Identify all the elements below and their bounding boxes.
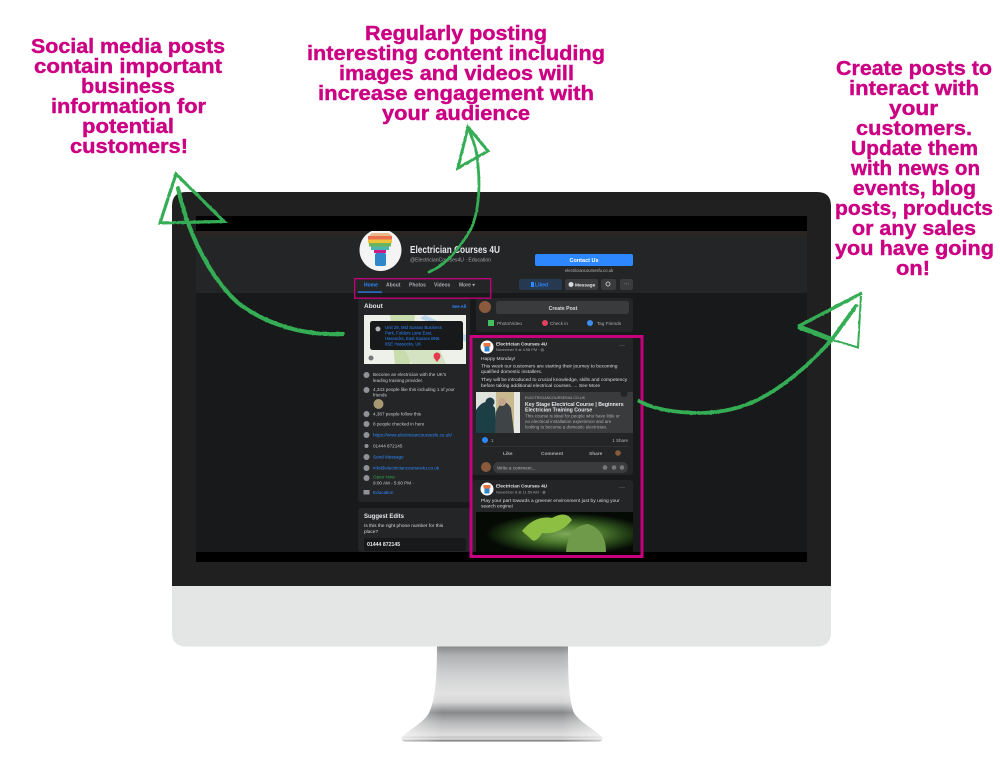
callout: engagement: interesting content including <box>307 42 605 65</box>
callout: interact with customers: or any sales <box>852 217 976 240</box>
post 1: This week our customers are starting their journey to becoming <box>481 364 618 370</box>
reactions: Comment <box>541 451 564 457</box>
post 1: November 9 at 4:08 PM · ◍ <box>496 347 545 352</box>
callout: interact with customers: Create posts to <box>836 57 992 80</box>
post 2: search engine! <box>481 504 513 510</box>
about details: Education <box>373 490 394 495</box>
highlight box: navigation tabs <box>355 279 491 298</box>
post 1: qualified domestic installers. <box>481 369 542 375</box>
link preview: Key Stage Electrical Course | Beginners <box>525 402 624 408</box>
top black band <box>196 216 807 231</box>
about details: Become an electrician with the UK's <box>373 372 447 377</box>
callout: interact with customers: posts, products <box>835 197 993 220</box>
callout: business information: potential <box>82 115 174 138</box>
monitor chin <box>172 580 831 646</box>
nav tabs: About <box>386 282 401 288</box>
screen background <box>196 216 807 562</box>
liked button: Liked <box>535 282 548 288</box>
callout: business information: Social media posts <box>31 35 225 58</box>
post 1: before taking additional electrical courses. ... See More <box>481 383 600 389</box>
post 1: They will be introduced to crucial knowledge, skills and competency <box>481 377 628 383</box>
callout: engagement <box>307 22 605 125</box>
reactions <box>481 437 628 457</box>
page handle: @ElectricianCourses4U · Education <box>410 258 491 264</box>
callout: business information: customers! <box>70 135 188 158</box>
panel: create post <box>476 298 633 332</box>
callout: interact with customers: customers. <box>856 117 972 140</box>
page header <box>196 236 807 293</box>
about details: 8 people checked in here <box>373 422 425 426</box>
panel: about <box>358 298 470 502</box>
callout: engagement: increase engagement with <box>318 82 594 105</box>
callout: interact with customers: interact with <box>849 77 979 100</box>
panel: suggest edits <box>358 508 470 552</box>
about details: https://www.electriciancoursesfu.co.uk/ <box>373 432 453 438</box>
callout: interact with customers: Update them <box>851 137 978 160</box>
post 2: November 8 at 11:59 AM · ◍ <box>496 490 546 494</box>
comment box: Write a comment... <box>497 466 535 470</box>
about icons <box>364 372 370 494</box>
post 1: Electrician Courses 4U <box>496 342 548 346</box>
reactions: Share <box>589 451 603 457</box>
about details: Send Message <box>373 454 404 460</box>
panel: create post: Photo/Video <box>497 321 522 326</box>
callout: interact with customers: events, blog <box>853 177 976 200</box>
message button: Message <box>575 282 596 288</box>
message button <box>565 279 598 290</box>
search button <box>601 279 616 290</box>
nav tabs: Photos <box>409 282 426 288</box>
monitor stand <box>402 646 602 742</box>
post 1: ··· <box>619 343 625 349</box>
panel: suggest edits: Suggest Edits <box>364 514 405 520</box>
facebook page screenshot <box>196 216 807 562</box>
callout: interact with customers <box>835 57 994 280</box>
post 1: Happy Monday! <box>481 356 515 362</box>
link preview: Electrician Training Course <box>525 408 592 414</box>
nav tabs: More ▾ <box>459 282 475 288</box>
about details: 01444 872145 <box>373 444 403 448</box>
panel: create post: Check in <box>550 321 568 326</box>
arrow: to timeline content <box>429 127 488 272</box>
panel: suggest edits: Is this the right phone number for this <box>364 523 444 529</box>
link preview: looking to become a domestic electrician. <box>525 424 607 430</box>
contact us button <box>535 254 633 266</box>
page name: Electrician Courses 4U <box>410 245 500 256</box>
highlight box: posts <box>471 336 642 556</box>
reactions: 1 <box>491 438 494 443</box>
map: Hassocks, East Sussex BN6 <box>385 336 440 341</box>
map: 8SE Hassocks, UK <box>385 342 421 346</box>
callout: business information <box>31 35 225 158</box>
link preview: This course is ideal for people who have little or <box>525 414 620 418</box>
about details: 9:00 AM - 5:00 PM · <box>373 480 414 486</box>
callout: business information: contain important <box>34 55 222 78</box>
callout: business information: business <box>81 75 175 98</box>
friend avatar <box>374 399 384 409</box>
about details: Open Now <box>373 474 395 480</box>
callout: engagement: your audience <box>382 102 530 125</box>
cover photo strip <box>196 231 807 236</box>
about details: 4,387 people follow this <box>373 412 422 416</box>
post 2: Electrician Courses 4U <box>496 484 548 488</box>
callout: interact with customers: you have going <box>835 237 994 260</box>
callout: interact with customers: on! <box>896 257 930 280</box>
more button <box>620 279 633 290</box>
map <box>364 315 466 364</box>
more button: ··· <box>624 282 629 288</box>
link preview: no electrical installation experience and are <box>525 419 612 424</box>
link preview: ELECTRICIANCOURSES4U.CO.UK <box>525 396 586 400</box>
callout: interact with customers: your <box>889 97 938 120</box>
arrow: to posts <box>639 293 862 413</box>
about details: friends <box>373 392 387 398</box>
callout: engagement: Regularly posting <box>365 22 547 45</box>
link preview <box>476 390 633 433</box>
panel: create post: Tag Friends <box>597 321 622 326</box>
post 2: Play your part towards a greener environment just by using your <box>481 498 620 504</box>
liked button <box>519 279 562 290</box>
comment box <box>481 462 628 473</box>
about details: 4,343 people like this including 1 of your <box>373 387 455 392</box>
map: Unit 29, Mid Sussex Business <box>385 325 442 330</box>
monitor bezel <box>172 192 831 586</box>
panel: suggest edits: 01444 872145 <box>367 542 400 548</box>
about heading: About <box>364 303 384 310</box>
post 2: ··· <box>619 485 625 491</box>
nav tabs: Home <box>364 282 378 288</box>
panel: suggest edits: place? <box>364 529 378 535</box>
reactions: 1 Share <box>612 438 628 443</box>
callout: interact with customers: with news on <box>850 157 980 180</box>
globe photo <box>476 512 633 552</box>
arrow: to about panel <box>160 174 343 334</box>
callout: business information: information for <box>51 95 206 118</box>
post 2 <box>472 480 633 552</box>
nav tabs: Videos <box>434 282 451 288</box>
bottom black band <box>196 552 807 562</box>
monitor <box>172 192 831 742</box>
contact us button: Contact Us <box>569 258 599 264</box>
nav tabs <box>358 282 475 293</box>
callout: engagement: images and videos will <box>339 62 574 85</box>
reactions: Like <box>503 451 513 457</box>
about details <box>373 372 455 495</box>
page logo <box>360 231 402 271</box>
about details: info@electriciancourses4u.co.uk <box>373 466 440 470</box>
about details: leading training provider. <box>373 378 423 383</box>
panel: create post: Create Post <box>549 306 578 312</box>
website link: electriciancoursesfu.co.uk <box>565 268 614 273</box>
post 1 <box>472 337 633 475</box>
see all link: See All <box>452 304 466 309</box>
map: Park, Folders Lane East, <box>385 330 432 336</box>
